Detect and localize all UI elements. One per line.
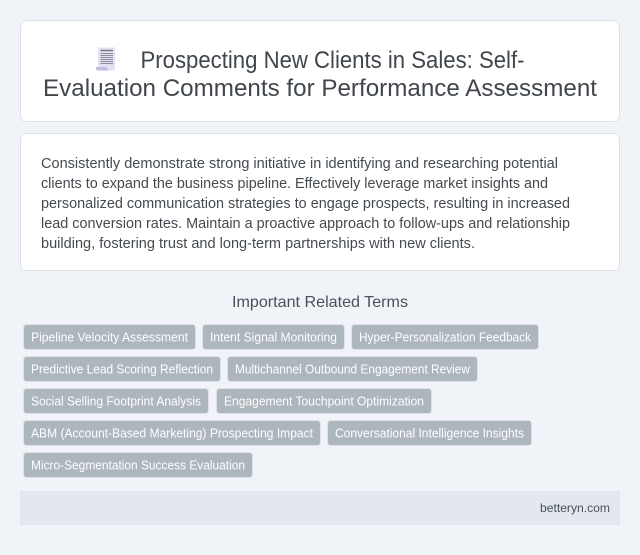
tag [202,324,344,350]
panel: summary text: building, fostering trust and long-term partnerships with new clients. [41,236,475,252]
tag [24,452,252,478]
tag: Multichannel Outbound Engagement Review [235,362,471,376]
panel: summary text: clients to expand the business pipeline. Effectively leverage market insights and [41,176,548,192]
icon: document scroll [96,48,115,70]
tag: Pipeline Velocity Assessment [31,330,188,344]
tag [352,324,538,350]
tag [228,356,478,382]
tag [328,420,532,446]
tag: Micro-Segmentation Success Evaluation [31,458,245,472]
tag: Predictive Lead Scoring Reflection [31,362,213,376]
panel: summary text [20,134,620,270]
tag: ABM (Account-Based Marketing) Prospecting Impact [31,426,313,440]
tag [24,388,208,414]
footer: betteryn.com [540,501,610,515]
tag: Hyper-Personalization Feedback [359,330,531,344]
title [43,47,597,102]
tag: Social Selling Footprint Analysis [31,394,201,408]
tag: Intent Signal Monitoring [210,330,337,344]
tag list [24,324,538,478]
tag: Conversational Intelligence Insights [335,426,524,440]
tag [24,356,220,382]
footer [20,491,620,525]
tag [216,388,432,414]
tag: Engagement Touchpoint Optimization [224,394,424,408]
tag [24,324,196,350]
panel: summary text: personalized communication strategies to engage prospects, resulting in increased [41,196,570,212]
panel: summary text: Consistently demonstrate strong initiative in identifying and researching potential [41,156,558,172]
tag [24,420,320,446]
panel: summary text: lead conversion rates. Maintain a proactive approach to follow-ups and relationship [41,216,570,232]
panel: header [20,20,620,122]
title: Evaluation Comments for Performance Assessment [43,75,597,102]
title: Prospecting New Clients in Sales: Self- [140,47,524,74]
heading: related terms: Important Related Terms [232,294,408,311]
